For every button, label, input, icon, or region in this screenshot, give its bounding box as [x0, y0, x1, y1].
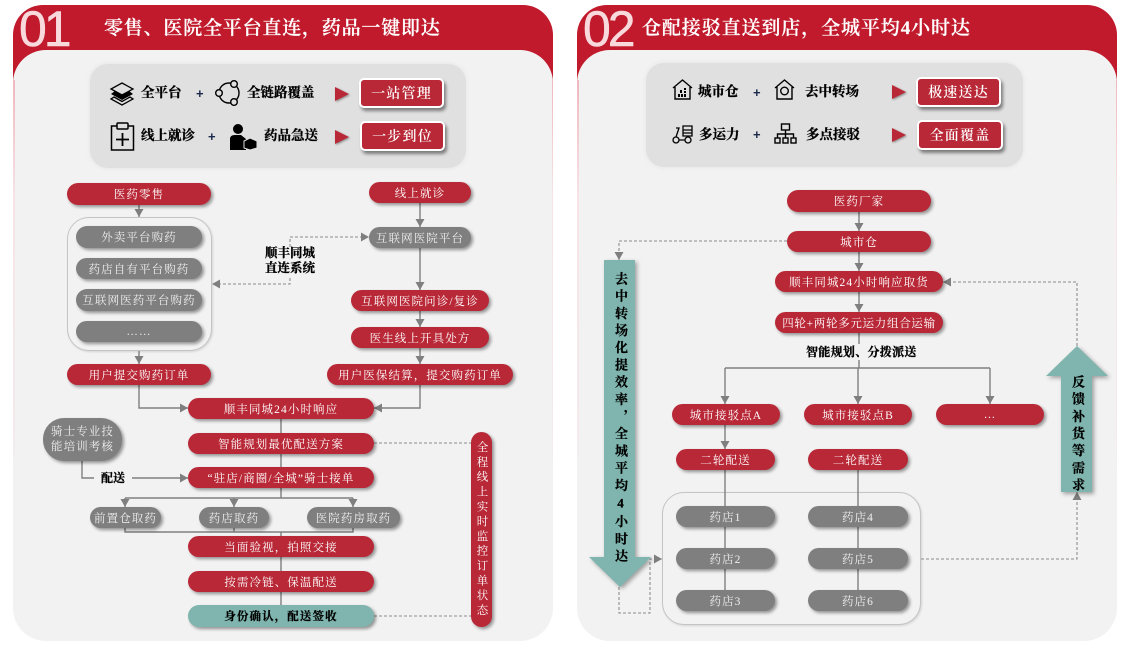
pharmacy 1 — [676, 506, 775, 527]
arrow: warehouse to pickup — [858, 252, 860, 271]
arrows: dispatch branches — [725, 368, 990, 404]
arrow: transfer efficiency — [589, 259, 654, 590]
flow node: 骑士培训: 能培训考核 — [51, 440, 114, 452]
label: 药品急送: 药品急送 — [264, 128, 318, 143]
flow node: 骑士接单 — [188, 467, 374, 488]
flow node: 城市接驳点A: 城市接驳点A — [690, 410, 762, 422]
flow node: 四轮+两轮 — [775, 312, 943, 333]
arrow marker — [892, 85, 908, 101]
platform: 外卖平台购药 — [76, 226, 202, 248]
arrow: hospital platform to consultation — [419, 248, 421, 290]
flow node: 身份确认: 身份确认，配送签收 — [224, 611, 338, 623]
icon: layers — [110, 82, 134, 106]
label: 全平台: 全平台 — [141, 85, 182, 100]
flow node: 互联网医院问诊/复诊: 互联网医院问诊/复诊 — [361, 296, 479, 308]
platform: more — [76, 321, 202, 342]
flow node: 互联网医院平台 — [369, 227, 471, 248]
icon: scooter — [672, 125, 693, 144]
flow node: 用户提交购药订单: 用户提交购药订单 — [89, 370, 189, 382]
flow node: 城市接驳点A — [672, 404, 780, 425]
platform: more: …… — [126, 326, 152, 338]
arrow: consultation to prescription — [419, 311, 421, 327]
pharmacy 4 — [808, 506, 908, 527]
plus sign: + — [208, 129, 216, 144]
container: purchase platforms — [67, 217, 212, 351]
label: 顺丰同城直连系统: 顺丰同城 — [265, 246, 315, 260]
flow node: 当面验视: 当面验视，拍照交接 — [224, 542, 338, 554]
flow node: 二轮配送 A — [676, 449, 775, 470]
flow node: 线上就诊: 线上就诊 — [395, 188, 445, 200]
platform: 药店自有平台购药 — [76, 258, 202, 279]
label: 顺丰同城直连系统 — [265, 246, 315, 275]
flow node: 骑士培训 — [43, 418, 122, 461]
vertical pill: monitoring: 全程线上实时监控订单状态 — [476, 441, 488, 618]
flow node: 互联网医院平台: 互联网医院平台 — [376, 232, 464, 244]
summary box 01 — [90, 64, 466, 168]
flow node: 二轮配送 B — [808, 449, 908, 470]
panel number 02: 02 — [583, 1, 633, 57]
flow node: 顺丰同城24小时响应: 顺丰同城24小时响应 — [224, 404, 338, 416]
pharmacy 3 — [676, 590, 775, 611]
flow node: 身份确认 — [188, 605, 374, 627]
pickup: 药店取药 — [199, 507, 269, 528]
arrow: prescription to settlement — [419, 348, 421, 364]
pharmacy 4: 药店4 — [842, 512, 874, 524]
plus sign: + — [753, 127, 761, 142]
label: 智能规划、分拨派送: 智能规划、分拨派送 — [806, 345, 917, 359]
button: 全面覆盖: 全面覆盖 — [930, 129, 990, 144]
pharmacy 5 — [808, 548, 908, 569]
arrow: feedback: 反馈补货等需求 — [1070, 375, 1085, 495]
pharmacy 6: 药店6 — [842, 596, 874, 608]
flow node: 城市接驳点B — [804, 404, 912, 425]
plus sign: + — [196, 86, 204, 101]
arrow: pickup to transport — [858, 292, 860, 312]
connector: pharmacies column A — [724, 470, 726, 590]
container: pharmacies — [662, 492, 921, 625]
icon: org tree — [774, 123, 797, 144]
arrow: hub A to two-wheel — [724, 425, 726, 449]
arrow: online consult to hospital platform — [419, 203, 421, 227]
pharmacy 1: 药店1 — [709, 512, 742, 524]
flow node: 顺丰同城24小时响应取货 — [775, 271, 943, 292]
pharmacy 6 — [808, 590, 908, 611]
pickup: 医院药房取药 — [307, 507, 400, 528]
flow node: 用户医保结算 — [327, 364, 513, 385]
platform: 药店自有平台购药: 药店自有平台购药 — [89, 264, 189, 276]
flow node: 医生线上开具处方: 医生线上开具处方 — [370, 332, 470, 344]
flow node: 用户医保结算: 用户医保结算，提交购药订单 — [338, 370, 502, 382]
connector: pickup merge — [125, 528, 353, 532]
panel number 01: 01 — [19, 1, 69, 57]
flow node: 医生线上开具处方 — [351, 327, 489, 348]
arrow: transfer efficiency: 去中转场化提效率，全城平均4小时达 — [613, 272, 628, 566]
button: 极速送达 — [916, 77, 1001, 107]
icon: courier with parcel — [230, 124, 256, 150]
button: 极速送达: 极速送达 — [928, 86, 989, 101]
pharmacy 3: 药店3 — [709, 596, 742, 608]
label: 顺丰同城直连系统: 直连系统 — [265, 261, 315, 275]
pickup: 前置仓取药 — [90, 507, 161, 528]
platform: 外卖平台购药: 外卖平台购药 — [101, 232, 177, 244]
arrow: manufacturer to city warehouse — [858, 212, 860, 231]
label: 多运力: 多运力 — [699, 127, 740, 142]
arrow marker — [334, 130, 350, 146]
flow node: 顺丰同城24小时响应取货: 顺丰同城24小时响应取货 — [789, 276, 929, 288]
summary box 02 — [646, 63, 1023, 167]
flow node: 二轮配送 B: 二轮配送 — [833, 454, 883, 466]
flow node: 顺丰同城24小时响应 — [188, 398, 374, 419]
flow node: 医药厂家: 医药厂家 — [834, 196, 884, 208]
button: 一站管理: 一站管理 — [371, 87, 432, 102]
label: 全链路覆盖: 全链路覆盖 — [247, 85, 314, 100]
label: 配送: 配送 — [101, 471, 125, 485]
flow node: more — [936, 404, 1044, 425]
icon: clipboard — [110, 122, 134, 151]
flow node: 城市接驳点B: 城市接驳点B — [822, 410, 894, 422]
connector: monitoring dashed lines — [374, 443, 471, 616]
arrow: transfer arrow to pharmacies — [619, 559, 662, 613]
flow node: 骑士培训: 骑士专业技 — [51, 426, 114, 438]
arrow: platforms to order — [138, 351, 140, 364]
flow node: 城市仓 — [787, 231, 931, 252]
flow node: 医药零售 — [67, 183, 211, 205]
arrow: retail to platforms — [138, 205, 140, 217]
arrow: settlement to response — [374, 384, 420, 408]
flow node: 智能规划 — [188, 433, 374, 454]
pickup: 前置仓取药: 前置仓取药 — [94, 512, 157, 524]
arrow: direct system to purchase platforms — [212, 278, 290, 284]
flow node: 按需冷链: 按需冷链、保温配送 — [224, 576, 338, 588]
button: 一站管理 — [359, 78, 444, 108]
connector: transport to label — [858, 333, 860, 368]
flow node: 医药零售: 医药零售 — [114, 189, 164, 201]
arrows: pickup branches — [125, 498, 353, 507]
plus sign: + — [753, 85, 761, 100]
arrow: rider training to dispatch — [82, 461, 188, 478]
flow node: 互联网医院问诊/复诊 — [351, 290, 489, 311]
label: 去中转场: 去中转场 — [805, 84, 859, 99]
arrow marker — [892, 128, 908, 144]
pharmacy 2 — [676, 548, 775, 569]
flow node: 二轮配送 A: 二轮配送 — [700, 454, 751, 466]
connector: central spine — [280, 419, 282, 605]
label: 多点接驳: 多点接驳 — [806, 127, 860, 142]
flow node: 城市仓: 城市仓 — [840, 236, 878, 248]
button: 一步到位 — [360, 121, 445, 151]
panel: 02 warehouse delivery — [577, 1, 1117, 641]
icon: chain cycle — [215, 80, 240, 106]
flow node: 当面验视 — [188, 536, 374, 557]
flow node: 医药厂家 — [787, 190, 931, 212]
arrow: feedback — [1046, 346, 1110, 497]
arrow: retail order to response — [139, 384, 188, 408]
label: 线上就诊: 线上就诊 — [141, 128, 195, 143]
platform: 互联网医药平台购药 — [76, 289, 202, 311]
flow node: 骑士接单: “驻店/商圈/全城”骑士接单 — [208, 472, 354, 484]
arrow: feedback to pickup — [943, 282, 1077, 346]
arrow: warehouse to transfer arrow — [619, 241, 787, 260]
flow node: 按需冷链 — [188, 571, 374, 592]
connector: pharmacies column B — [857, 470, 859, 590]
platform: 互联网医药平台购药: 互联网医药平台购药 — [82, 295, 196, 307]
pharmacy 5: 药店5 — [842, 554, 874, 566]
heading 01: 零售、医院全平台直连，药品一键即达 — [104, 18, 441, 39]
label: 城市仓: 城市仓 — [698, 84, 738, 99]
button: 全面覆盖 — [917, 120, 1003, 150]
panel: 01 retail and hospital — [13, 1, 553, 641]
arrow: pharmacies to feedback — [921, 492, 1077, 559]
pickup: 药店取药: 药店取药 — [209, 512, 259, 524]
pharmacy 2: 药店2 — [709, 554, 742, 566]
icon: transfer hub — [774, 79, 794, 100]
vertical pill: monitoring — [471, 432, 492, 627]
flow node: 四轮+两轮: 四轮+两轮多元运力组合运输 — [782, 318, 936, 330]
pickup: 医院药房取药: 医院药房取药 — [316, 512, 391, 524]
flow node: 用户提交购药订单 — [67, 364, 211, 385]
button: 一步到位: 一步到位 — [372, 130, 433, 145]
flow node: 线上就诊 — [369, 182, 471, 203]
arrow: direct system to hospital platform — [290, 237, 369, 247]
arrow marker — [334, 87, 350, 103]
heading 02: 仓配接驳直送到店，全城平均4小时达 — [642, 18, 971, 39]
icon: city warehouse — [672, 79, 692, 100]
flow node: 智能规划: 智能规划最优配送方案 — [218, 438, 344, 450]
flow node: more: … — [984, 408, 996, 420]
